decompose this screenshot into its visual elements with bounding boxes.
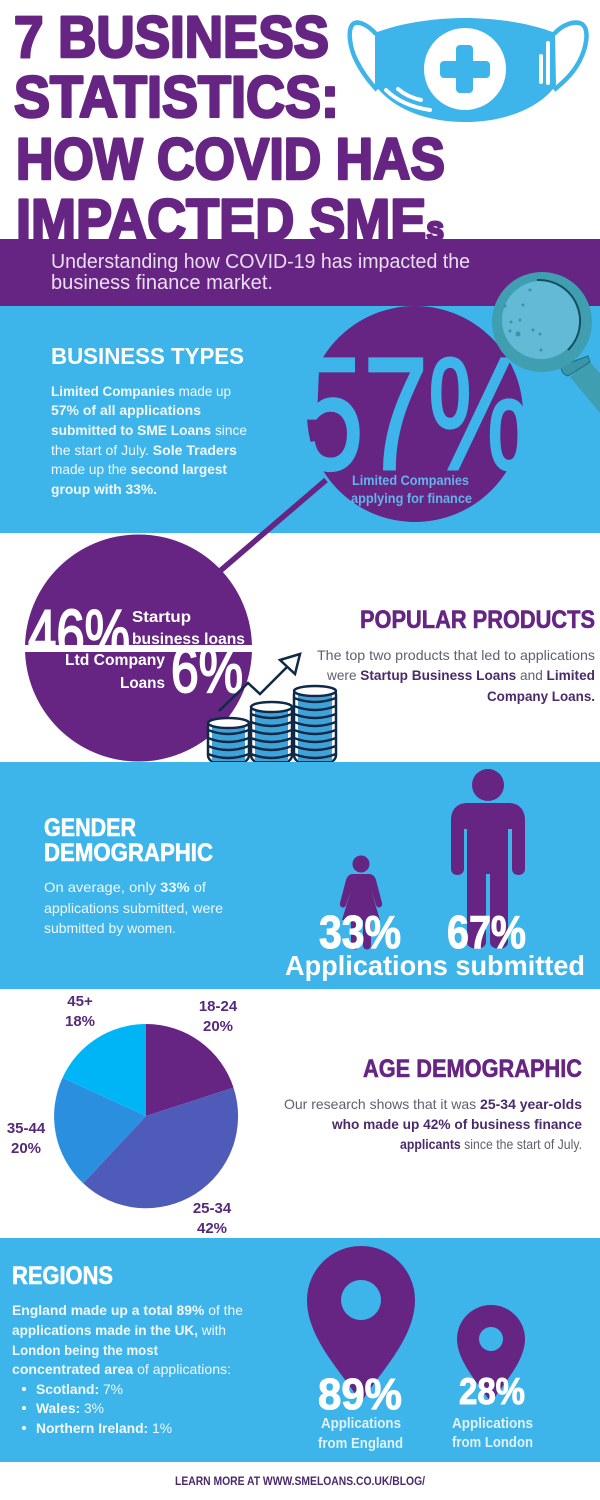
icon: man figure	[451, 769, 525, 949]
pie labels: 35-44	[7, 1120, 46, 1137]
panel: subtitle band: Understanding how COVID-19 has impacted the	[51, 250, 470, 273]
split circle chart: 46%	[28, 596, 130, 672]
title: 7 BUSINESS	[14, 5, 329, 70]
text: business types: Limited Companies made up	[51, 383, 231, 399]
footer link: LEARN MORE AT WWW.SMELOANS.CO.UK/BLOG/	[175, 1474, 426, 1488]
split circle chart	[20, 534, 260, 762]
big circle: 57%	[299, 306, 531, 522]
text: age demographic: Our research shows that it was 25-34 year-olds	[284, 1096, 582, 1112]
text: gender demographic: On average, only 33% of	[44, 879, 206, 895]
pie labels: 20%	[203, 1018, 233, 1035]
split circle chart: business loans	[132, 631, 245, 648]
text: business types: the start of July. Sole Traders	[51, 442, 237, 458]
stat: 67%: 67%	[447, 906, 526, 958]
text: business types: submitted to SME Loans since	[51, 422, 247, 438]
big circle: 57%: Limited Companies	[352, 472, 469, 488]
panel: age demographic	[7, 993, 582, 1237]
title	[14, 5, 445, 253]
caption: applications from England	[318, 1415, 403, 1452]
pie labels: 20%	[11, 1140, 41, 1157]
pie labels	[7, 993, 238, 1237]
text: age demographic: who made up 42% of business finance	[331, 1116, 582, 1132]
heading: gender demographic	[44, 814, 213, 867]
split circle chart: Loans	[120, 675, 165, 692]
pie labels: 45+	[67, 993, 93, 1010]
text: business types: made up the second largest	[51, 461, 227, 477]
split circle chart: 6%	[171, 634, 243, 706]
text: popular products	[317, 647, 595, 704]
heading: gender demographic: DEMOGRAPHIC	[44, 839, 213, 867]
caption: applications from London	[452, 1415, 533, 1451]
text: age demographic: applicants since the start of July.	[400, 1136, 582, 1152]
text: business types	[51, 383, 247, 497]
text: regions: England made up a total 89% of the	[12, 1302, 243, 1318]
text: age demographic	[284, 1096, 582, 1152]
panel: subtitle band	[0, 239, 600, 306]
text: business types: group with 33%.	[51, 481, 157, 497]
text: gender demographic: submitted by women.	[44, 920, 176, 936]
pie labels: 42%	[197, 1220, 227, 1237]
title: STATISTICS:	[14, 65, 339, 130]
icon: large map pin	[307, 1246, 415, 1403]
text: regions: Wales: 3%	[36, 1400, 104, 1416]
panel: business types	[0, 272, 600, 533]
stat: 28%: 28%	[459, 1371, 525, 1412]
split circle chart: Ltd Company	[65, 652, 165, 669]
text: gender demographic: applications submitted, were	[44, 900, 223, 916]
icon: magnifying glass	[492, 272, 600, 413]
icon: woman figure	[340, 856, 382, 950]
panel: subtitle band: business finance market.	[51, 271, 273, 294]
heading: regions: REGIONS	[12, 1262, 113, 1290]
stat: 33%: 33%	[319, 906, 401, 958]
text: regions: London being the most	[12, 1342, 158, 1358]
caption: applications from London: from London	[452, 1434, 533, 1451]
icon: small map pin	[457, 1305, 525, 1403]
text: regions: concentrated area of applications:	[12, 1361, 231, 1377]
caption: applications from London: Applications	[452, 1415, 533, 1432]
panel: gender demographic	[0, 762, 600, 989]
pie labels: 25-34	[193, 1200, 232, 1217]
pie chart	[54, 1024, 238, 1208]
connector line	[220, 480, 326, 571]
pie labels: 18-24	[199, 998, 238, 1015]
caption: applications submitted: Applications submitted	[285, 950, 585, 981]
caption: applications from England: from England	[318, 1435, 403, 1452]
text: popular products: Company Loans.	[487, 688, 595, 704]
text: regions	[12, 1302, 243, 1436]
split circle chart: Startup	[132, 609, 191, 626]
icon: coin stacks and arrow	[208, 654, 336, 762]
pie labels: 18%	[65, 1013, 95, 1030]
text: popular products: were Startup Business Loans and Limited	[326, 667, 595, 683]
title: HOW COVID HAS	[16, 127, 445, 192]
text: business types: 57% of all applications	[51, 402, 201, 418]
text: regions: applications made in the UK, with	[12, 1322, 226, 1338]
big circle: 57%: applying for finance	[351, 490, 472, 506]
caption: applications from England: Applications	[321, 1415, 401, 1432]
heading: business types: BUSINESS TYPES	[51, 343, 244, 369]
title: IMPACTED SMEs	[16, 188, 444, 253]
text: regions: Scotland: 7%	[36, 1381, 123, 1397]
stat: 89%: 89%	[318, 1370, 402, 1419]
text: gender demographic	[44, 879, 223, 936]
icon: face mask	[350, 18, 586, 122]
text: popular products: The top two products that led to applications	[317, 647, 595, 663]
panel: regions	[0, 1238, 600, 1462]
text: regions: Northern Ireland: 1%	[36, 1420, 172, 1436]
panel: popular products	[20, 534, 595, 762]
heading: gender demographic: GENDER	[44, 814, 136, 842]
